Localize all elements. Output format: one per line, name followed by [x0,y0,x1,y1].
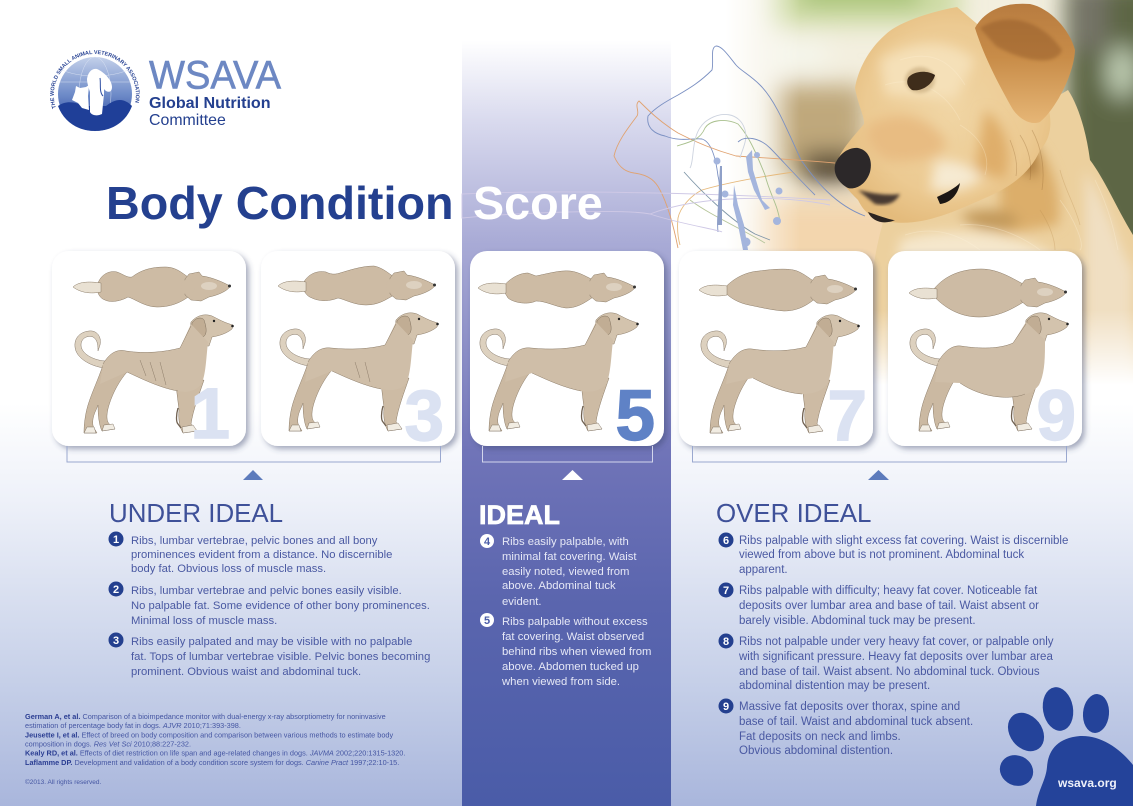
item 4: minimal fat covering. Waist [502,551,637,563]
item 7 [718,582,1039,627]
item 6: apparent. [739,564,788,576]
item 4: above. Abdominal tuck [502,580,616,592]
item 9 [718,698,973,757]
item 9: Fat deposits on neck and limbs. [739,731,901,743]
logo globe [58,57,132,131]
heading: ideal: IDEAL [479,500,560,530]
arrow: ideal [562,470,583,480]
dog ear [975,4,1075,123]
references: German A, et al. Comparison of a bioimpedance monitor with dual-energy x-ray absorptiometry for noninvasive [25,712,386,721]
item 1: 1 [113,534,119,546]
item 6: viewed from above but is not prominent. Abdominal tuck [739,549,1024,561]
item 8: Ribs not palpable under very heavy fat cover, or palpable only [739,636,1054,648]
logo: WSAVA Global Nutrition Committee: THE WORLD SMALL ANIMAL VETERINARY ASSOCIATION [50,50,140,110]
item 2: Minimal loss of muscle mass. [131,615,277,627]
card: score 9 [888,251,1082,456]
logo wordmark: WSAVA [149,54,281,98]
item 5: fat covering. Waist observed [502,631,644,643]
item 4: evident. [502,596,542,608]
item 1 [108,532,392,575]
item 7: 7 [723,585,729,597]
item 2: No palpable fat. Some evidence of other bony prominences. [131,600,430,612]
item 5: Ribs palpable without excess [502,616,648,628]
item 7: deposits over lumbar area and base of tail. Waist absent or [739,600,1039,612]
line art: cat and dog outlines [462,46,865,248]
item 5: behind ribs when viewed from [502,646,651,658]
card: score 7 [679,251,873,456]
item 3: prominent. Obvious waist and abdominal tuck. [131,666,361,678]
item 2: 2 [113,584,119,596]
card: score 9: 9 [1036,377,1076,456]
item 4 [480,534,637,608]
item 6: 6 [723,535,729,547]
panel: over ideal [716,500,1068,757]
item 4: 4 [484,536,491,548]
item 8: and base of tail. Waist absent. No abdominal tuck. Obvious [739,666,1040,678]
item 8: with significant pressure. Heavy fat deposits over lumbar area [738,651,1053,663]
line art: paint splatters [714,150,782,250]
item 7: barely visible. Abdominal tuck may be present. [739,615,976,627]
photo: golden retriever [742,0,1133,378]
arrow: under ideal [243,470,263,480]
bracket: ideal [482,446,652,462]
item 7: Ribs palpable with difficulty; heavy fat cover. Noticeable fat [739,585,1038,597]
item 4: easily noted, viewed from [502,566,629,578]
item 9: Massive fat deposits over thorax, spine and [739,701,960,713]
item 3: fat. Tops of lumbar vertebrae visible. Pelvic bones becoming [131,651,430,663]
dog eye [907,72,935,90]
panel: under ideal [108,500,430,678]
logo ring text [54,54,136,110]
item 1: prominences evident from a distance. No discernible [131,549,392,561]
card: score 3: 3 [404,377,444,456]
dog muzzle and mouth shadow [858,190,900,205]
references: Kealy RD, et al. Effects of diet restriction on life span and age-related changes in dogs. JAVMA 2002;220:1315-1320. [25,748,405,758]
dog nose [835,148,871,188]
item 4: Ribs easily palpable, with [502,536,629,548]
item 3: 3 [113,635,119,647]
item 6: Ribs palpable with slight excess fat covering. Waist is discernible [739,535,1068,547]
references [25,712,405,786]
arrow: over ideal [868,470,889,480]
item 1: body fat. Obvious loss of muscle mass. [131,563,326,575]
references: ©2013. All rights reserved. [25,778,102,786]
heading: over ideal: OVER IDEAL [716,500,871,528]
ideal column band [462,0,671,806]
item 2: Ribs, lumbar vertebrae and pelvic bones easily visible. [131,585,402,597]
dog head [836,7,1050,223]
heading: under ideal: UNDER IDEAL [109,500,283,528]
item 5: when viewed from side. [501,676,620,688]
logo: WSAVA Global Nutrition Committee: Global Nutrition [149,94,271,112]
card: score 7: 7 [828,377,867,456]
references: Laflamme DP. Development and validation of a body condition score system for dogs. Canine Pract 1997;22:10-15. [25,758,399,767]
card: score 3 [261,251,455,456]
card: score 1 [52,251,246,454]
item 9: base of tail. Waist and abdominal tuck absent. [739,716,973,728]
item 9: Obvious abdominal distention. [739,745,893,757]
icon: paw with wsava.org: wsava.org [1057,776,1117,790]
item 6 [718,532,1068,576]
icon: paw with wsava.org [995,685,1133,806]
item 3: Ribs easily palpated and may be visible with no palpable [131,636,412,648]
references: estimation of percentage body fat in dogs. AJVR 2010;71:393-398. [25,721,241,730]
item 9: 9 [723,701,729,713]
item 5: 5 [484,615,490,627]
dog fur streaks [885,56,1118,250]
references: composition in dogs. Res Vet Sci 2010;88:227-232. [25,740,191,748]
title: Body Condition [106,177,454,229]
bracket: over ideal [692,446,1066,462]
title [106,177,603,229]
item 3 [108,632,430,678]
card: score 5: 5 [616,377,655,456]
item 8: 8 [723,636,729,648]
item 8: abdominal distention may be present. [739,680,930,692]
logo: WSAVA Global Nutrition Committee [50,50,282,132]
item 1: Ribs, lumbar vertebrae, pelvic bones and all bony [131,535,378,547]
panel: ideal [479,500,651,688]
references: Jeusette I, et al. Effect of breed on body composition and comparison between various methods to estimate body [25,730,393,740]
dog chest and body [873,90,1133,376]
item 8 [718,634,1054,692]
title: Score [473,177,603,229]
logo: WSAVA Global Nutrition Committee: Committee [149,112,226,129]
item 2 [108,582,430,627]
card: score 1: 1 [190,375,230,454]
bracket: under ideal [67,446,440,462]
item 5 [480,613,651,688]
card: score 5 [470,251,664,456]
item 5: above. Abdomen tucked up [502,661,639,673]
